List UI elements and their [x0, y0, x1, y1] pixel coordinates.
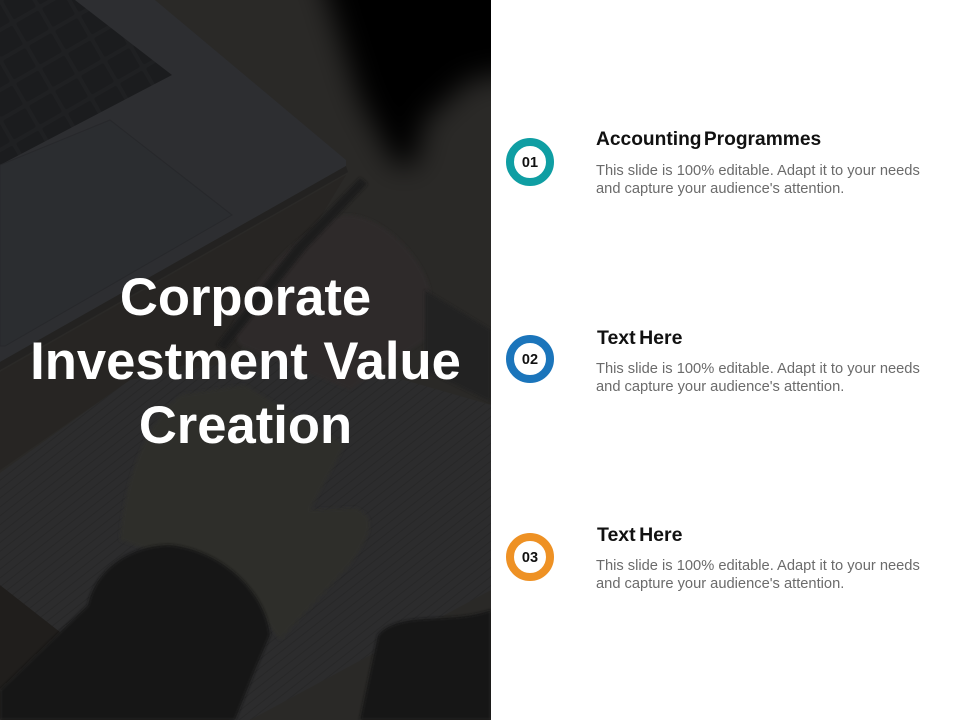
title: Creation: [139, 396, 352, 455]
title: Investment Value: [30, 332, 461, 391]
laptop trackpad: [0, 120, 232, 346]
icon: number ring 03: [506, 533, 554, 581]
text block: Accounting Programmes: and capture your audience's attention.: [596, 181, 844, 197]
person head in shadow: [315, 0, 530, 165]
text block: Accounting Programmes: [596, 129, 920, 197]
text block: Text Here 02: This slide is 100% editable. Adapt it to your needs: [596, 361, 920, 377]
panel: darkened photo of laptop and hands writing: [0, 0, 491, 720]
lower hand on notebook: [120, 385, 369, 640]
text block: Text Here 03: and capture your audience's attention.: [596, 576, 844, 592]
dark arm bottom right: [360, 610, 491, 720]
icon: number ring 01: 01: [522, 155, 538, 171]
desk background: [0, 175, 346, 690]
title: Corporate: [120, 268, 371, 327]
text block: Text Here 03: [596, 524, 920, 592]
laptop: [0, 0, 348, 370]
icon: number ring 01: [506, 138, 554, 186]
laptop keyboard: [0, 0, 172, 165]
icon: number ring 02: 02: [522, 352, 538, 368]
title: [30, 268, 461, 455]
text block: Text Here 02: Text Here: [597, 327, 682, 349]
notebook: [0, 350, 491, 720]
text block: Text Here 03: This slide is 100% editable. Adapt it to your needs: [596, 558, 920, 574]
icon: number ring 02: [506, 335, 554, 383]
text block: Accounting Programmes: Accounting Programmes: [596, 129, 821, 150]
text block: Text Here 02: and capture your audience's attention.: [596, 379, 844, 395]
text block: Accounting Programmes: This slide is 100% editable. Adapt it to your needs: [596, 163, 920, 179]
writing hand and pen: [217, 178, 491, 402]
dark sleeve: [0, 545, 270, 720]
text block: Text Here 03: Text Here: [597, 524, 682, 546]
icon: number ring 03: 03: [522, 550, 538, 566]
text block: Text Here 02: [596, 327, 920, 395]
